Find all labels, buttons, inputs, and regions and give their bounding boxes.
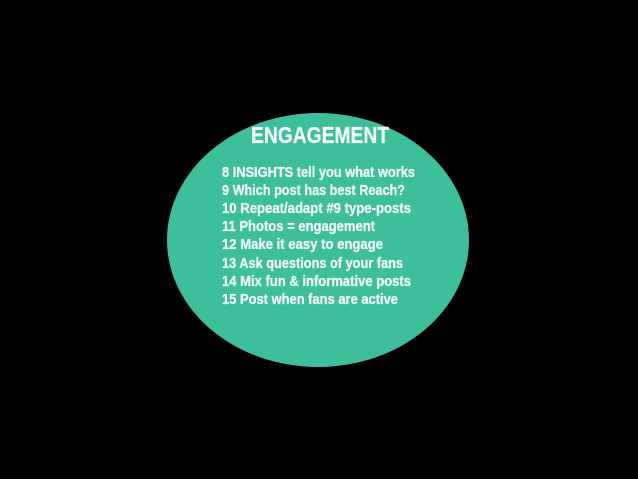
heading: ENGAGEMENT: ENGAGEMENT — [251, 122, 390, 148]
tip 8: 8 INSIGHTS tell you what works — [222, 164, 415, 181]
tip 12: 12 Make it easy to engage — [222, 236, 383, 253]
tip 9: 9 Which post has best Reach? — [222, 182, 405, 199]
tip 11: 11 Photos = engagement — [222, 218, 375, 235]
tip 10: 10 Repeat/adapt #9 type-posts — [222, 200, 411, 217]
tip 15: 15 Post when fans are active — [222, 291, 398, 308]
text block: engagement tips — [222, 164, 415, 308]
tip 14: 14 Mix fun & informative posts — [222, 273, 411, 290]
panel: engagement circle — [167, 113, 469, 367]
tip 13: 13 Ask questions of your fans — [222, 255, 403, 272]
